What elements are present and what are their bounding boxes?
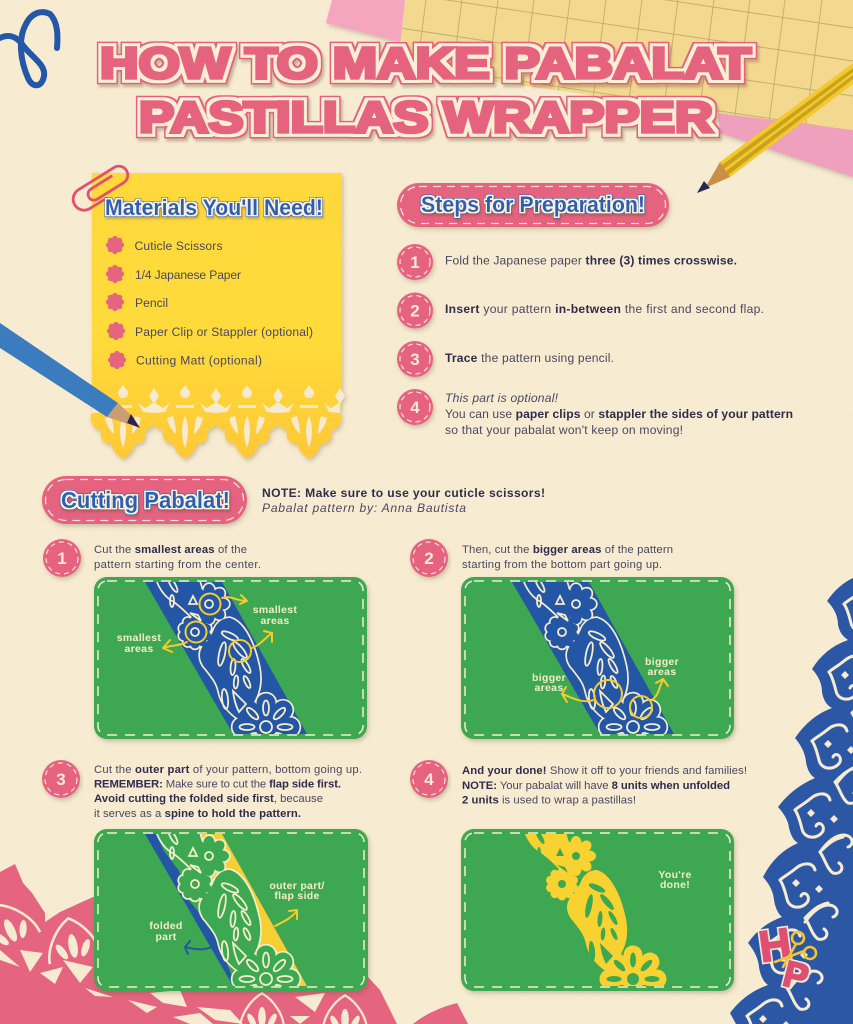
step 2 text and badge: 2	[424, 549, 434, 568]
step 1 text and badge: pattern starting from the center.	[94, 559, 261, 571]
icon: paper clip	[69, 163, 133, 214]
card 2	[461, 577, 734, 757]
card 1: smallest	[253, 604, 297, 616]
note text: NOTE: Make sure to use your cuticle scissors!	[262, 486, 545, 500]
step 2: 2	[410, 302, 420, 320]
materials heading: Materials You'll Need!	[105, 195, 323, 220]
step 2: Insert your pattern in-between the first and second flap.	[445, 302, 764, 316]
note text	[262, 486, 545, 515]
title	[100, 39, 751, 142]
card 2: bigger	[645, 656, 679, 668]
logo: H and P with scissors: H	[756, 919, 794, 972]
card 1: areas	[261, 615, 289, 627]
step 4: 4	[410, 398, 420, 417]
logo: H and P with scissors	[756, 919, 816, 998]
card 1	[94, 577, 367, 757]
highlight circles and arrows	[562, 679, 668, 718]
card 2: areas	[535, 682, 563, 694]
card 1: areas	[125, 643, 153, 655]
logo: H and P with scissors: P	[779, 953, 812, 998]
highlight circles and arrows	[163, 594, 272, 662]
step 1 text and badge: 1	[57, 549, 67, 568]
materials list: Paper Clip or Stappler (optional)	[135, 325, 313, 339]
ribbon heading	[397, 183, 669, 227]
panel: steps for preparation	[397, 183, 793, 437]
step 2 text and badge: Then, cut the bigger areas of the pattern	[462, 544, 673, 556]
pink sticky paper behind grid	[326, 0, 853, 177]
blue lace corner	[730, 561, 853, 1024]
title: HOW TO MAKE PABALAT	[100, 39, 751, 88]
card 4: You're	[658, 869, 692, 881]
ribbon heading: Steps for Preparation!	[421, 192, 645, 217]
step 3	[397, 341, 614, 377]
icon: blue pencil	[0, 323, 140, 428]
card 3: part	[155, 931, 177, 943]
pink lace corner	[0, 864, 468, 1024]
card 3: flap side	[274, 890, 320, 902]
step 3 text and badge: Avoid cutting the folded side first, because	[94, 793, 323, 805]
step 2	[397, 292, 764, 328]
note paper	[91, 173, 345, 459]
step 3 text and badge: REMEMBER: Make sure to cut the flap side first.	[94, 778, 341, 790]
materials list	[106, 236, 313, 369]
step 4 text and badge	[410, 760, 747, 806]
step 1: Fold the Japanese paper three (3) times crosswise.	[445, 254, 737, 268]
icon: yellow pencil	[697, 63, 853, 193]
materials list: Cuticle Scissors	[134, 239, 222, 253]
step 2 text and badge	[410, 539, 673, 577]
step 3 text and badge: it serves as a spine to hold the pattern.	[94, 808, 301, 820]
step 4: You can use paper clips or stappler the sides of your pattern	[445, 407, 793, 421]
card 2: bigger	[532, 672, 566, 684]
yellow grid paper	[398, 0, 853, 131]
step 4: so that your pabalat won't keep on moving!	[445, 423, 683, 437]
step 4 text and badge: 4	[424, 770, 434, 789]
materials list: 1/4 Japanese Paper	[135, 268, 241, 282]
note text: Pabalat pattern by: Anna Bautista	[262, 501, 466, 515]
panel: cutting pabalat	[42, 476, 747, 1009]
card 3	[94, 829, 368, 1009]
step 3 text and badge: 3	[56, 770, 66, 789]
ribbon heading	[42, 476, 247, 524]
card 1: smallest	[117, 632, 161, 644]
step 3: Trace the pattern using pencil.	[445, 351, 614, 365]
materials list: Pencil	[135, 296, 168, 310]
step 1 text and badge: Cut the smallest areas of the	[94, 544, 247, 556]
step 4 text and badge: 2 units is used to wrap a pastillas!	[462, 794, 636, 806]
step 3: 3	[410, 350, 420, 369]
card 2: areas	[648, 666, 676, 678]
step 1	[397, 244, 737, 280]
icon: blue scribble	[0, 12, 57, 85]
card 3: folded	[149, 920, 183, 932]
step 4 text and badge: And your done! Show it off to your friends and families!	[462, 765, 747, 777]
step 4	[397, 389, 793, 437]
step 3 text and badge: Cut the outer part of your pattern, bottom going up.	[94, 764, 362, 776]
card 3: outer part/	[269, 880, 325, 892]
step 1 text and badge	[43, 539, 261, 577]
title: PASTILLAS WRAPPER	[139, 93, 713, 142]
step 4: This part is optional!	[445, 391, 559, 405]
step 4 text and badge: NOTE: Your pabalat will have 8 units when unfolded	[462, 780, 730, 792]
step 3 text and badge	[42, 760, 362, 820]
ribbon heading: Cutting Pabalat!	[61, 487, 230, 513]
step 2 text and badge: starting from the bottom part going up.	[462, 559, 662, 571]
arrows	[185, 910, 297, 954]
step 1: 1	[410, 253, 420, 272]
materials list: Cutting Matt (optional)	[136, 354, 262, 368]
panel: materials note	[69, 163, 345, 459]
card 4	[461, 829, 734, 1009]
card 4: done!	[660, 879, 690, 891]
